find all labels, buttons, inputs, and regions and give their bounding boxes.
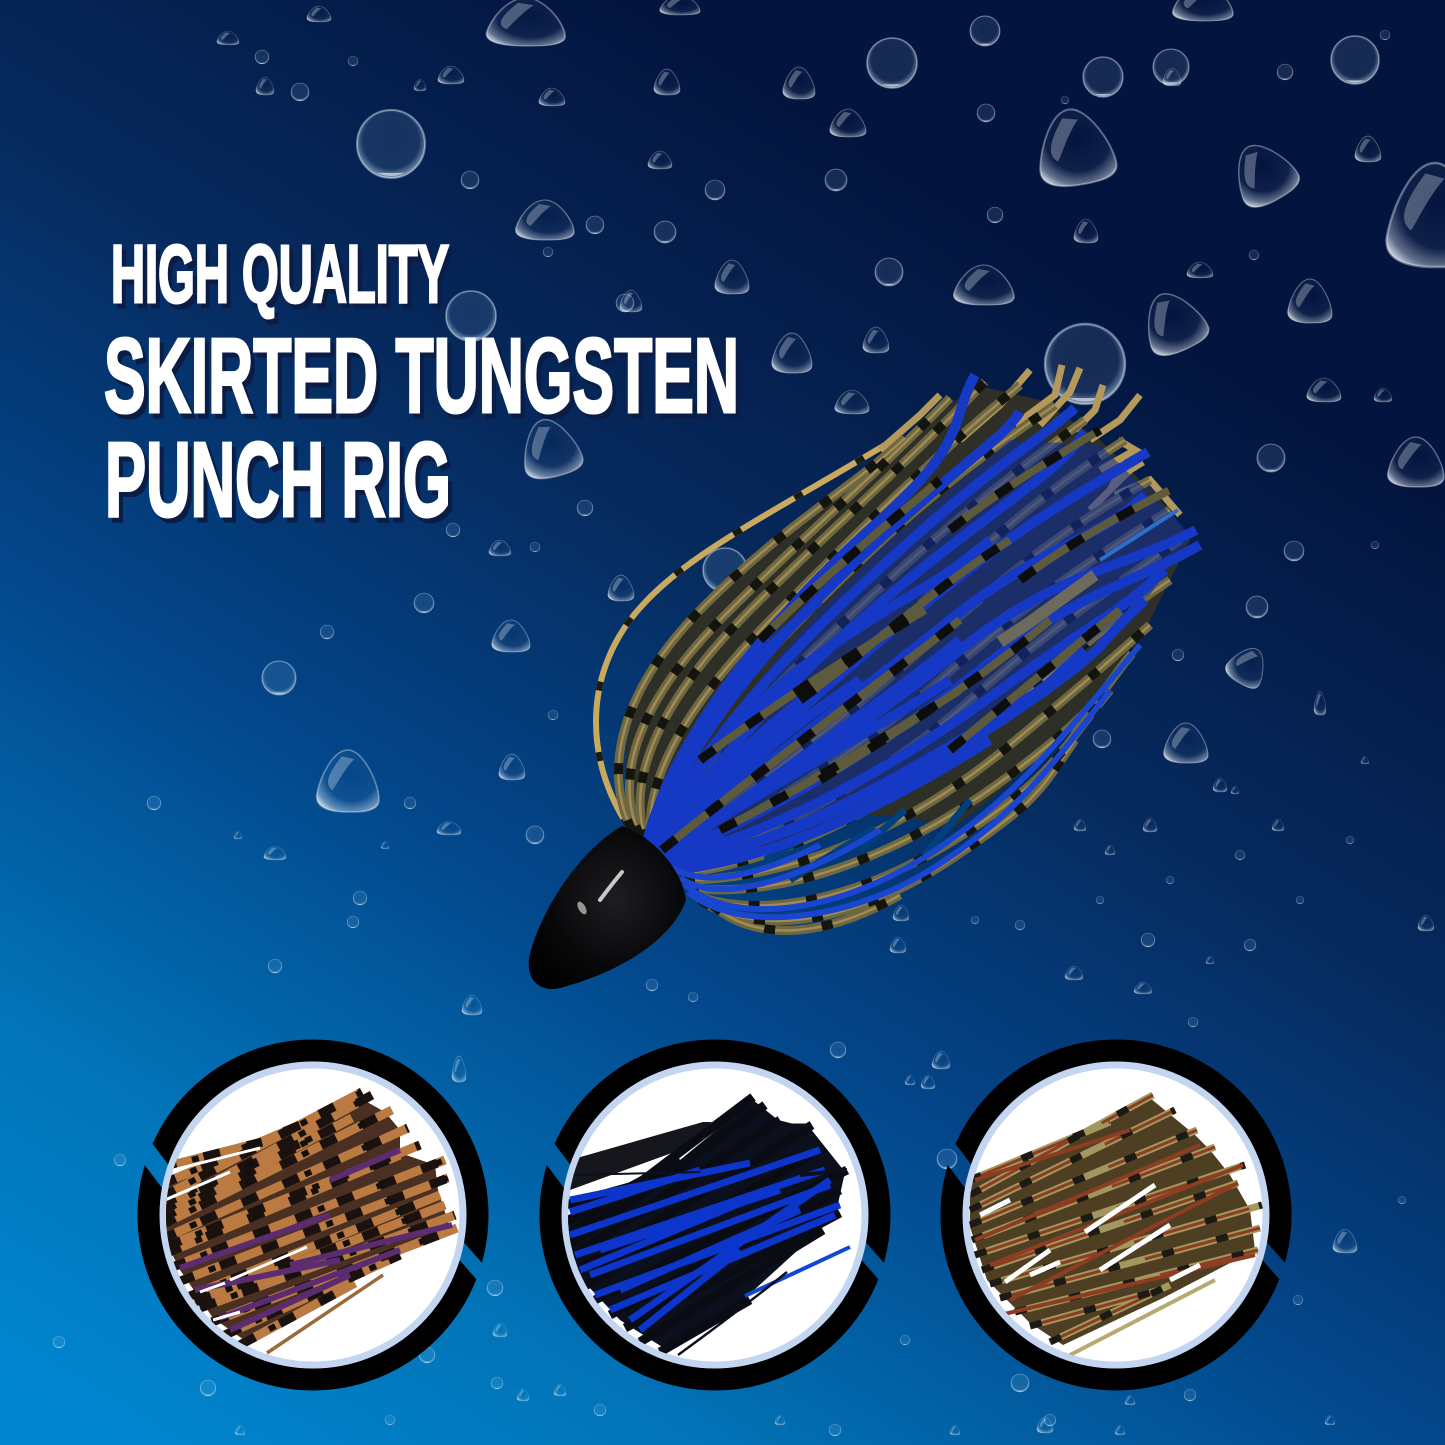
weight head: [529, 826, 686, 989]
title shadow: PUNCH RIG: [109, 426, 455, 544]
colour option 1: orange-brown skirt: [149, 1051, 477, 1379]
title lines: [104, 229, 739, 539]
title lines: SKIRTED TUNGSTEN: [104, 317, 739, 435]
title shadow: SKIRTED TUNGSTEN: [108, 322, 743, 440]
colour option 3: green pumpkin and red skirt: [952, 1051, 1280, 1379]
skirt: rubber strands: [596, 365, 1200, 930]
strands: [160, 1092, 457, 1353]
title lines: HIGH QUALITY: [111, 229, 449, 320]
product: skirted tungsten punch rig: [529, 365, 1200, 989]
title shadow: [108, 234, 743, 544]
title lines: PUNCH RIG: [105, 421, 451, 539]
title: High Quality Skirted Tungsten Punch Rig: [104, 229, 743, 544]
colour option 2: black and blue skirt: [551, 1051, 879, 1379]
strands: [970, 1095, 1262, 1355]
gaps between lower strands: [765, 800, 970, 880]
title shadow: HIGH QUALITY: [115, 234, 453, 325]
strands: [565, 1097, 850, 1355]
